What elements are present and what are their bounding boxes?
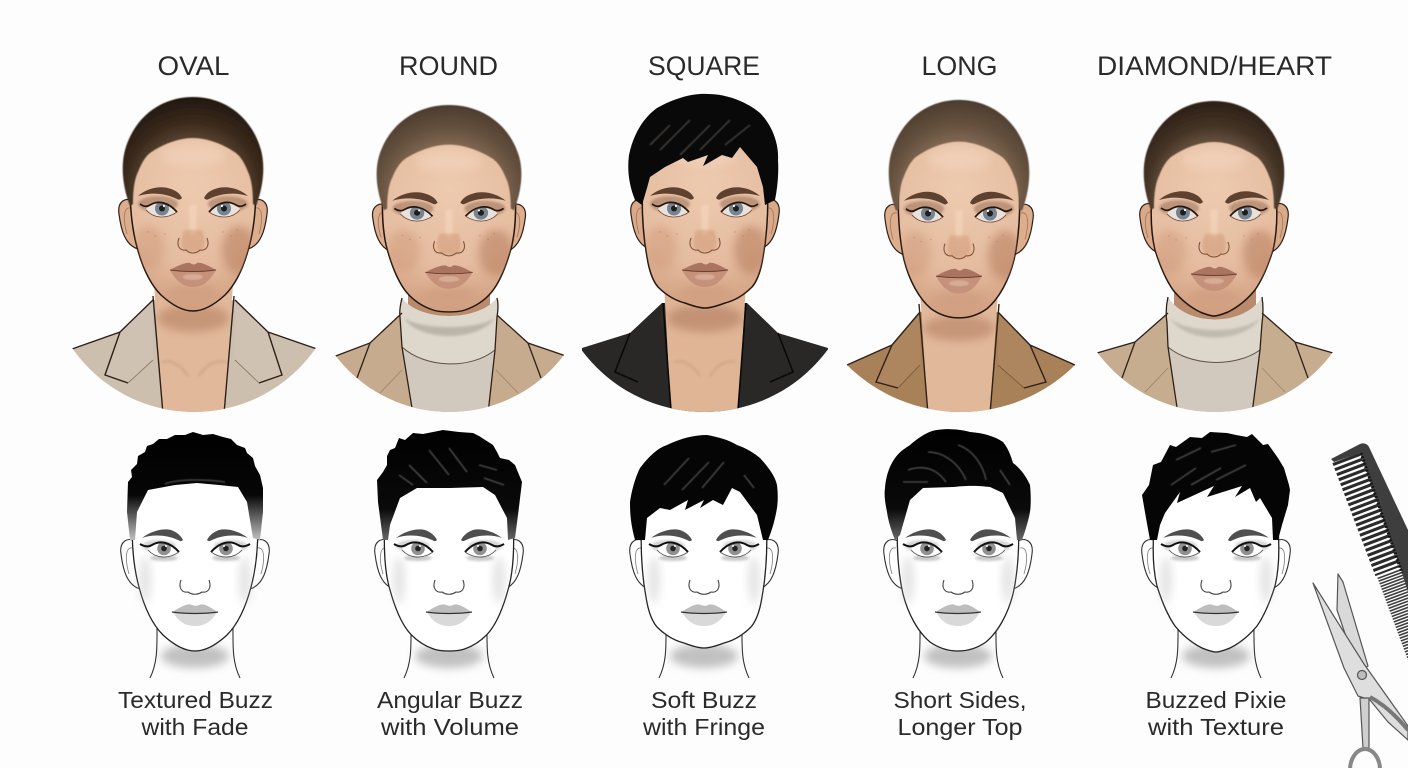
label: Short Sides, Longer Top: Short Sides, (894, 687, 1026, 713)
hair: swept top (885, 429, 1031, 540)
heading: SQUARE: SQUARE (648, 51, 760, 81)
sketch: angular buzz with volume (375, 430, 523, 678)
portrait: square face, black pixie, black blazer (582, 94, 828, 420)
label: Textured Buzz with Fade: with Fade (140, 714, 248, 740)
sketch: short sides, longer top (884, 429, 1032, 678)
label: Buzzed Pixie with Texture: with Texture (1147, 714, 1284, 740)
hair: angular volume (377, 430, 522, 540)
portrait: round face, buzzed hair, turtleneck and tan blazer (333, 105, 566, 420)
portrait: diamond/heart face, buzzed hair, turtleneck and tan blazer (1097, 101, 1333, 420)
label: Buzzed Pixie with Texture: Buzzed Pixie (1146, 687, 1286, 713)
icon: comb (1331, 443, 1408, 670)
hair: textured fade (127, 432, 263, 540)
sketch: buzzed pixie with texture (1142, 432, 1290, 678)
label: Angular Buzz with Volume: with Volume (380, 714, 519, 740)
sketch: textured buzz with fade (121, 432, 269, 678)
portrait: long face, buzzed hair, brown blazer (847, 100, 1075, 420)
heading: DIAMOND/HEART: DIAMOND/HEART (1097, 51, 1332, 81)
sketch: soft buzz with fringe (630, 435, 778, 678)
label: Soft Buzz with Fringe: with Fringe (642, 714, 765, 740)
hair: pixie (628, 94, 778, 205)
label: Angular Buzz with Volume: Angular Buzz (377, 687, 523, 713)
label: Soft Buzz with Fringe: Soft Buzz (651, 687, 757, 713)
hair: textured pixie (1142, 432, 1290, 540)
label: Textured Buzz with Fade: Textured Buzz (118, 687, 273, 713)
heading: LONG: LONG (922, 51, 998, 81)
portrait: oval face, buzzed hair, beige blazer (72, 97, 317, 420)
hair: soft fringe (630, 435, 778, 540)
label: Short Sides, Longer Top: Longer Top (898, 714, 1022, 740)
heading: ROUND: ROUND (399, 51, 498, 81)
icon: scissors (1313, 574, 1408, 768)
heading: OVAL: OVAL (158, 51, 230, 81)
